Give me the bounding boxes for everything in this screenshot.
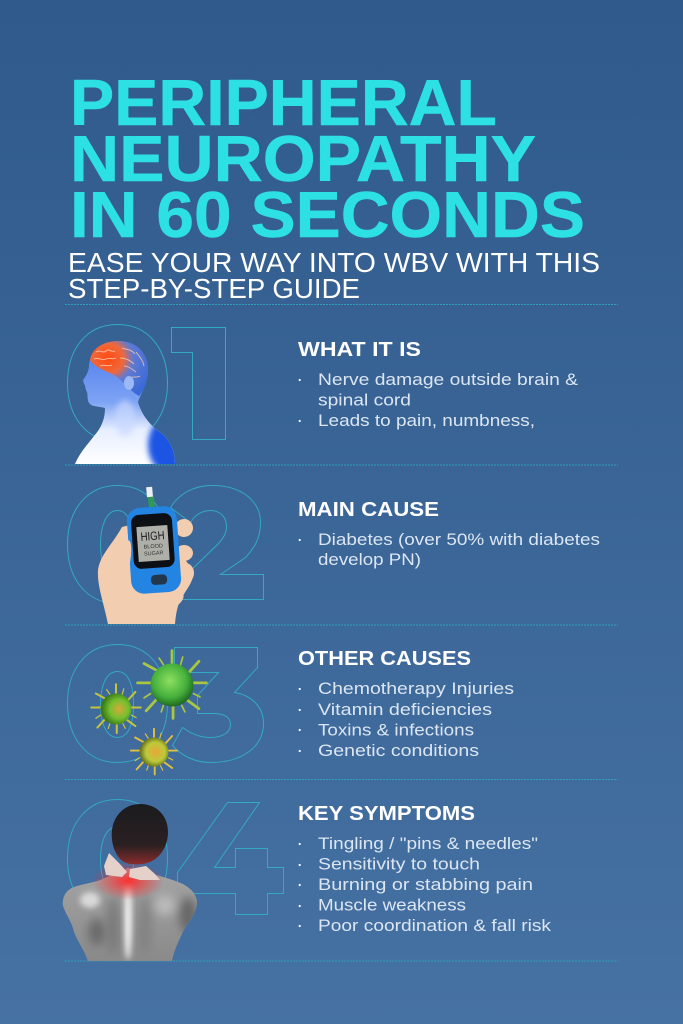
medium virus [91,684,141,733]
bullet list: spinal cord [318,392,411,410]
panel: what it is [68,324,578,475]
bullet list: Muscle weakness [318,896,466,914]
bullet list: Nerve damage outside brain & [318,371,578,389]
back muscle shading [80,880,197,960]
icon: hand holding glucose meter [98,487,194,624]
bullet list [299,680,514,760]
bullet list: Leads to pain, numbness, [318,412,535,430]
bullet list: Burning or stabbing pain [318,876,533,894]
number 03 outline [68,644,264,762]
subtitle: EASE YOUR WAY INTO WBV WITH THIS [68,247,600,278]
panel: other causes [68,644,514,774]
test strip [146,487,153,497]
bullet list: Genetic conditions [318,742,479,760]
icon: man with neck pain seen from behind [63,804,197,961]
panel: key symptoms [63,800,552,961]
hair and head [112,804,168,864]
icon: green virus particles [91,651,206,774]
bullet list: Poor coordination & fall risk [318,917,552,935]
meter body [126,505,182,595]
bullet list: Toxins & infections [318,722,474,740]
neck pain glow [92,862,164,900]
title: NEUROPATHY [70,122,536,195]
number 02 outline [68,486,264,604]
hand [98,525,193,624]
meter reading: HIGH [140,528,165,544]
big virus [138,651,206,718]
number 04 outline [68,800,284,918]
title [70,66,585,251]
bullet list [299,835,552,935]
hands [104,853,160,880]
meter body: BLOOD [143,543,163,551]
meter body: SUGAR [144,550,164,558]
heading: KEY SYMPTOMS [298,802,475,825]
subtitle [68,247,600,304]
icon: human head with glowing brain [75,341,175,464]
bullet list [299,531,600,569]
subtitle: STEP-BY-STEP GUIDE [68,273,360,304]
heading: OTHER CAUSES [298,647,471,670]
heading: WHAT IT IS [298,338,421,361]
panel: main cause [68,486,600,624]
title: PERIPHERAL [70,66,497,139]
number 01 outline [68,324,226,442]
bullet list: Diabetes (over 50% with diabetes [318,531,600,549]
bullet list: Vitamin deficiencies [318,701,492,719]
back [63,868,197,961]
bullet list: Sensitivity to touch [318,856,480,874]
small virus [131,729,177,774]
bullet list: develop PN) [318,551,421,569]
bullet list: Tingling / "pins & needles" [318,835,538,853]
bullet list: Chemotherapy Injuries [318,680,514,698]
heading: MAIN CAUSE [298,498,439,521]
bullet list [299,371,578,430]
fingers [174,518,194,583]
thumb and palm overlap [116,539,187,613]
title: IN 60 SECONDS [70,178,585,251]
